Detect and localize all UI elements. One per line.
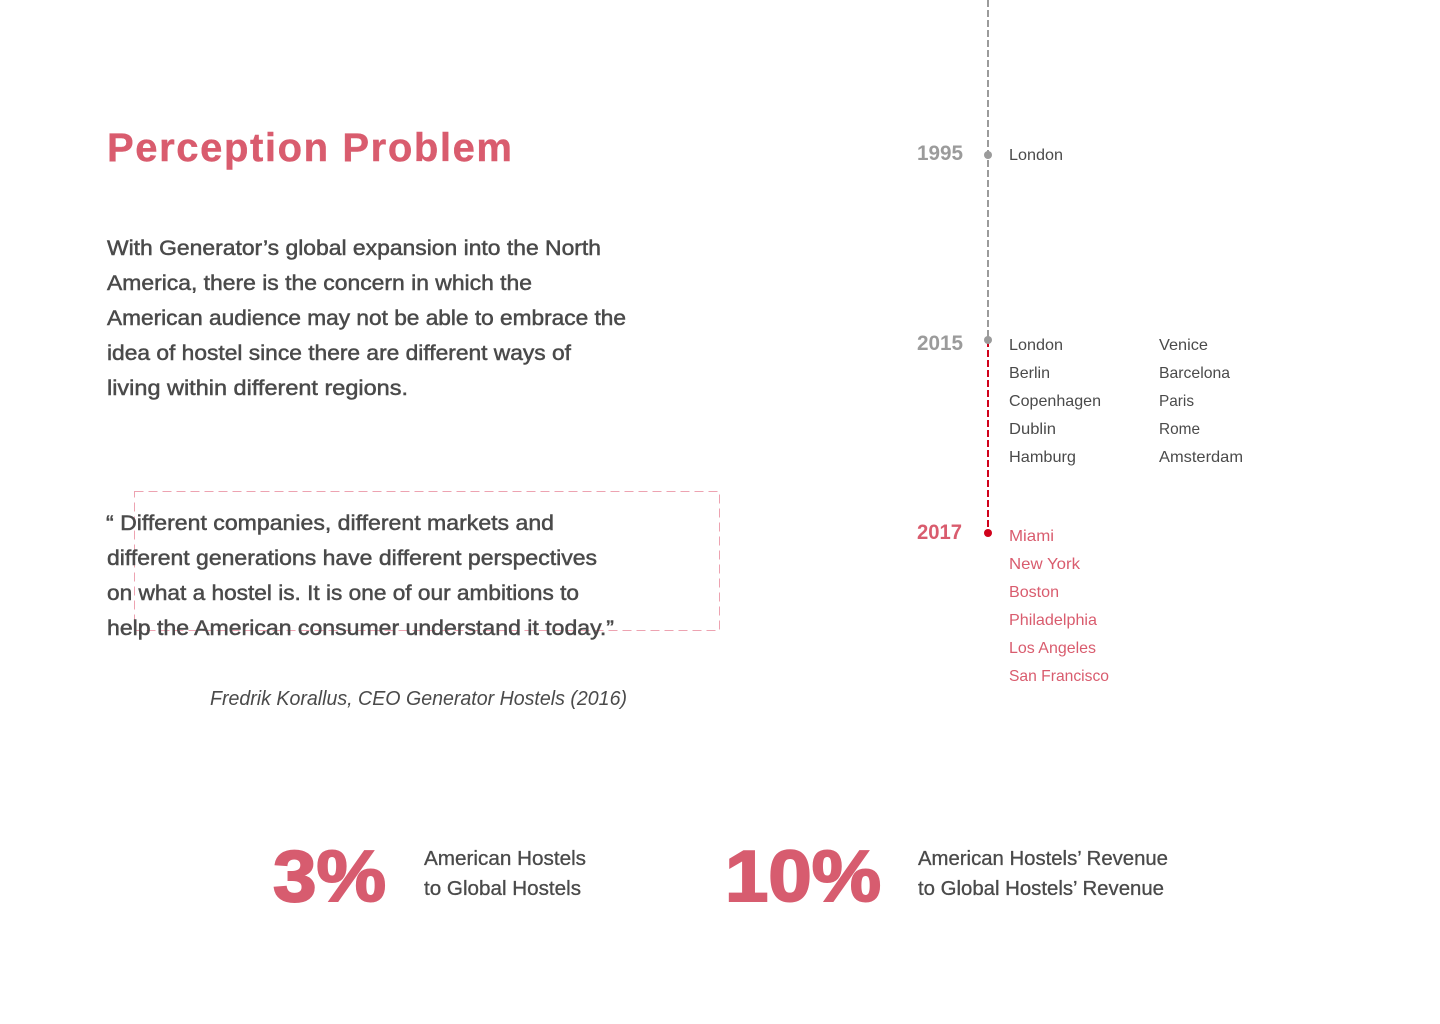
- marker: 2015: [984, 336, 992, 344]
- cities 2015 column 1: [1009, 337, 1101, 466]
- cities 2017: San Francisco: [1009, 668, 1109, 685]
- stat caption: 10%: [918, 848, 1168, 900]
- intro paragraph: America, there is the concern in which the: [107, 271, 532, 295]
- cities 2017: New York: [1009, 556, 1081, 573]
- stat: 10%: 10%: [725, 837, 881, 917]
- intro paragraph: American audience may not be able to embrace the: [107, 306, 626, 330]
- cities 2015 column 2: Amsterdam: [1159, 449, 1243, 466]
- marker: 1995: [984, 151, 992, 159]
- quote: help the American consumer understand it today.”: [107, 616, 614, 640]
- cities 2015 column 1: London: [1009, 337, 1063, 354]
- stat: 3%: 3%: [273, 837, 386, 917]
- stat caption: 3%: to Global Hostels: [424, 878, 581, 900]
- quote: different generations have different perspectives: [107, 546, 597, 570]
- cities 1995: London: [1009, 147, 1063, 164]
- cities 2017: Los Angeles: [1009, 640, 1096, 657]
- cities 2017: Boston: [1009, 584, 1059, 601]
- intro paragraph: [107, 236, 626, 400]
- intro paragraph: idea of hostel since there are different ways of: [107, 341, 571, 365]
- stat: 3%: [273, 837, 586, 917]
- dashed quote frame: [134, 492, 720, 630]
- cities 2017: [1009, 528, 1109, 685]
- cities 2015 column 1: Hamburg: [1009, 449, 1076, 466]
- cities 2015 column 2: Venice: [1159, 337, 1208, 354]
- year 2015: 2015: [917, 332, 963, 355]
- quote: “ Different companies, different markets and: [106, 511, 554, 535]
- cities 2015 column 2: Barcelona: [1159, 365, 1230, 382]
- marker: 2017: [984, 529, 992, 537]
- intro paragraph: With Generator’s global expansion into the North: [107, 236, 601, 260]
- year 2017: 2017: [917, 521, 962, 544]
- cities 2015 column 1: Dublin: [1009, 421, 1056, 438]
- quote: [106, 511, 614, 640]
- cities 2015 column 1: Copenhagen: [1009, 393, 1101, 410]
- cities 2015 column 2: Rome: [1159, 421, 1200, 438]
- cities 2015 column 1: Berlin: [1009, 365, 1050, 382]
- year 1995: 1995: [917, 142, 963, 165]
- title: Perception Problem: [107, 126, 512, 170]
- quote: on what a hostel is. It is one of our ambitions to: [107, 581, 579, 605]
- cities 2015 column 2: [1159, 337, 1243, 466]
- cities 2017: Philadelphia: [1009, 612, 1097, 629]
- stat caption: 3%: [424, 848, 586, 900]
- stat caption: 3%: American Hostels: [424, 848, 586, 870]
- stat caption: 10%: to Global Hostels’ Revenue: [918, 878, 1164, 900]
- stat: 10%: [725, 837, 1168, 917]
- intro paragraph: living within different regions.: [107, 376, 408, 400]
- quote attribution: Fredrik Korallus, CEO Generator Hostels (2016): [210, 688, 627, 710]
- stat caption: 10%: American Hostels’ Revenue: [918, 848, 1168, 870]
- timeline: [917, 0, 992, 544]
- cities 2017: Miami: [1009, 528, 1054, 545]
- cities 2015 column 2: Paris: [1159, 393, 1194, 410]
